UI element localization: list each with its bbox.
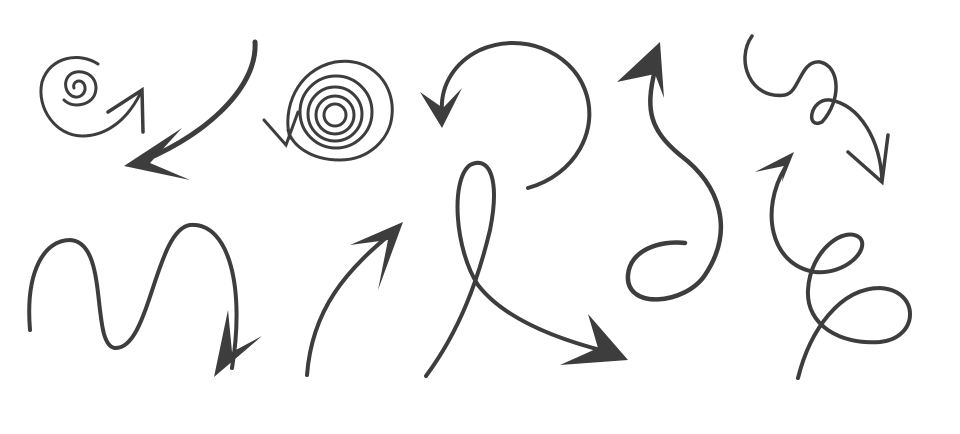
arrow: wave bottom-left [29, 225, 262, 377]
arrow: curly top-right pointing down [745, 36, 888, 182]
arrow: concentric spiral [264, 61, 392, 160]
arrow: diagonal up-right [307, 222, 403, 375]
arrow: big arc pointing down [420, 43, 589, 188]
arrow: big loop pointing right [426, 163, 628, 376]
arrow: small spiral top-left [41, 58, 143, 136]
arrow: S-curve pointing up [617, 42, 721, 299]
arrow: long curve pointing left [124, 42, 255, 180]
arrow: loops bottom-right pointing up [755, 152, 910, 378]
